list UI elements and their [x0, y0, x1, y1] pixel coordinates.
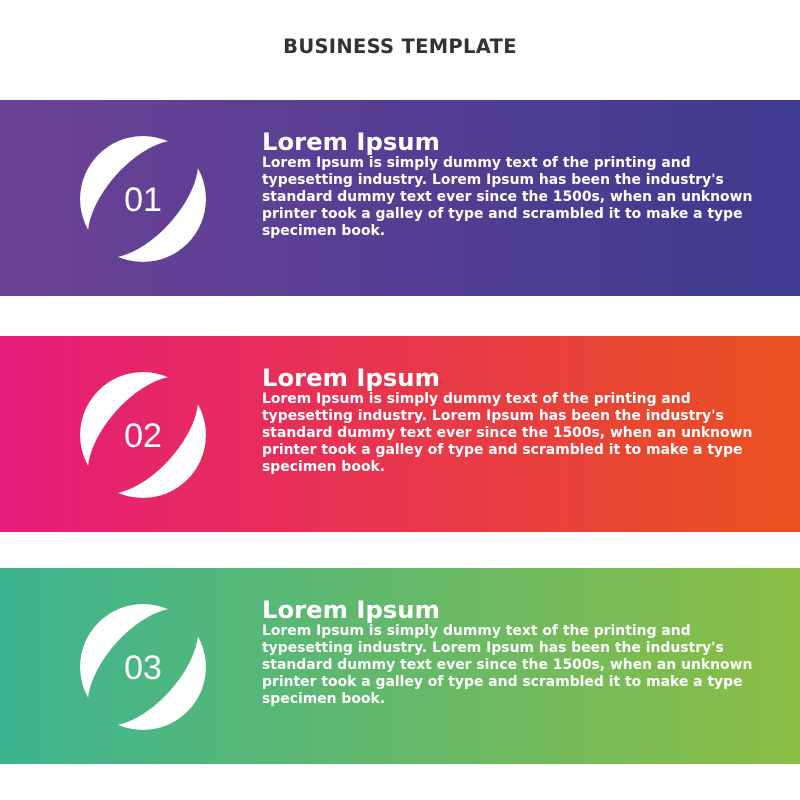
text block 03: Lorem Ipsum	[262, 595, 440, 624]
panel: 02	[0, 336, 800, 532]
text block 01: typesetting industry. Lorem Ipsum has been the industry's	[262, 172, 724, 188]
text block 03: printer took a galley of type and scrambled it to make a type	[262, 674, 743, 690]
icon: 03	[80, 604, 206, 730]
text block 01: Lorem Ipsum is simply dummy text of the printing and	[262, 155, 691, 171]
text block 02: specimen book.	[262, 459, 385, 475]
icon: 02: 02	[124, 417, 162, 455]
icon: 01: 01	[124, 181, 162, 219]
text block 03: Lorem Ipsum is simply dummy text of the printing and	[262, 623, 691, 639]
icon: 02	[80, 372, 206, 498]
text block 01: Lorem Ipsum	[262, 127, 440, 156]
panel: 01	[0, 100, 800, 296]
title: BUSINESS TEMPLATE	[283, 35, 517, 58]
text block 01: standard dummy text ever since the 1500s, when an unknown	[262, 189, 752, 205]
text block 03: specimen book.	[262, 691, 385, 707]
text block 02: standard dummy text ever since the 1500s, when an unknown	[262, 425, 752, 441]
text block 03: typesetting industry. Lorem Ipsum has been the industry's	[262, 640, 724, 656]
text block 03	[262, 595, 752, 707]
text block 02: Lorem Ipsum is simply dummy text of the printing and	[262, 391, 691, 407]
text block 01	[262, 127, 752, 239]
text block 02	[262, 363, 752, 475]
text block 02: Lorem Ipsum	[262, 363, 440, 392]
text block 02: printer took a galley of type and scrambled it to make a type	[262, 442, 743, 458]
panel: 03	[0, 568, 800, 764]
icon: 01	[80, 136, 206, 262]
text block 01: specimen book.	[262, 223, 385, 239]
text block 02: typesetting industry. Lorem Ipsum has been the industry's	[262, 408, 724, 424]
icon: 03: 03	[124, 649, 162, 687]
text block 03: standard dummy text ever since the 1500s, when an unknown	[262, 657, 752, 673]
text block 01: printer took a galley of type and scrambled it to make a type	[262, 206, 743, 222]
